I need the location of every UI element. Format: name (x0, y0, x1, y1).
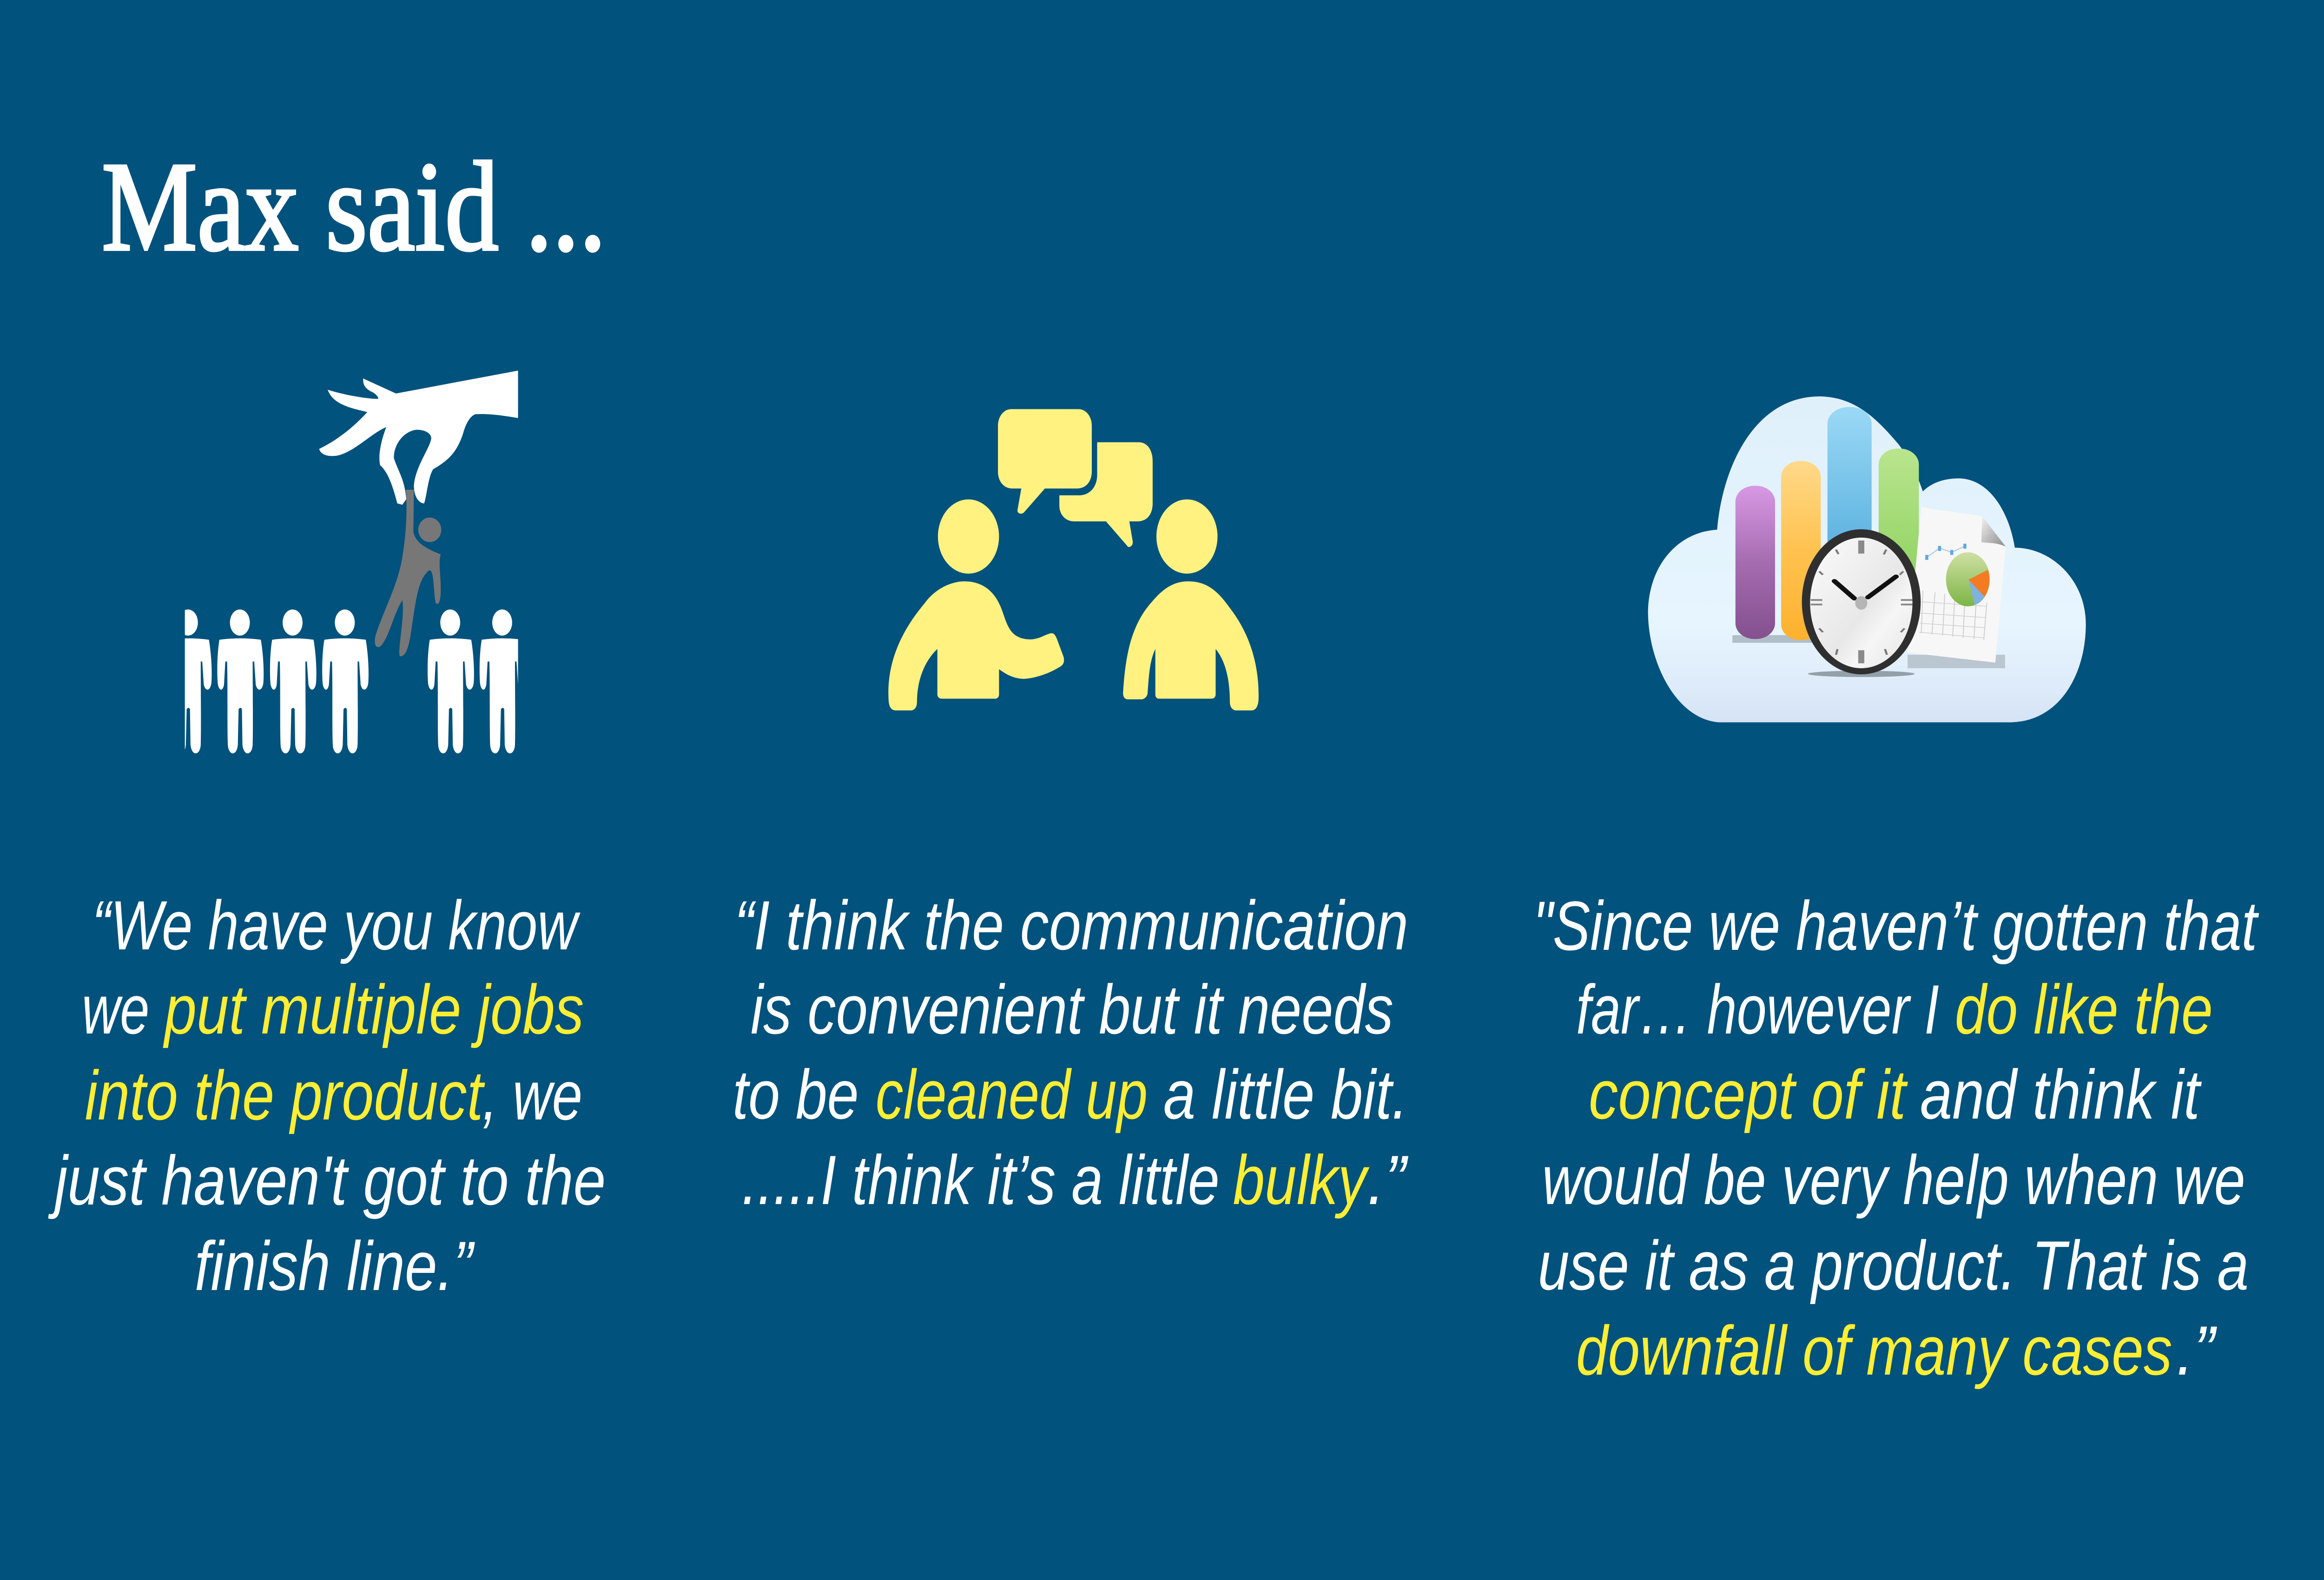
icon part: clock (1802, 529, 1921, 674)
icon part: clock shadow (1808, 671, 1915, 677)
quote: concept and downfall: far… however I (1576, 971, 1939, 1049)
icon part: right speech bubble (1059, 442, 1153, 547)
quote: communication is bulky: a little bit. (1163, 1056, 1408, 1134)
quote: concept and downfall (1533, 888, 2259, 1390)
quote: concept and downfall: do like the (1955, 971, 2213, 1049)
icon part: report shadow (1908, 655, 2005, 668)
quote: concept and downfall: concept of it (1589, 1056, 1908, 1134)
icon part: left person (888, 500, 1064, 711)
icon part: hanging grey figure (375, 490, 441, 656)
quote: communication is bulky (733, 887, 1408, 1219)
icon part: orange bar (1781, 461, 1821, 640)
quote: communication is bulky: cleaned up (876, 1056, 1148, 1134)
icon part: purple bar (1736, 486, 1775, 639)
icon: two people talking with speech bubbles (888, 409, 1259, 711)
quote: communication is bulky: is convenient but it needs (751, 971, 1393, 1049)
quote: concept and downfall: would be very help when we (1542, 1142, 2245, 1219)
quote: concept and downfall: downfall of many cases (1576, 1312, 2172, 1390)
quote: communication is bulky: to be (733, 1056, 859, 1134)
icon: hand picking a person from a crowd (165, 370, 526, 753)
icon part: blue bar (1828, 407, 1872, 565)
quote: Max on multiple jobs: just haven't got to the (48, 1142, 606, 1220)
icon part: report page (1908, 507, 2006, 663)
slide: Max said quotes (48, 159, 2259, 1389)
quote: concept and downfall: use it as a product. That is a (1538, 1227, 2249, 1305)
quote: Max on multiple jobs: into the product (85, 1057, 485, 1135)
quote: Max on multiple jobs (48, 887, 606, 1305)
quote: Max on multiple jobs: finish line.” (195, 1228, 475, 1305)
quote: communication is bulky: .” (1367, 1142, 1408, 1219)
icon part: green bar (1879, 448, 1919, 584)
icon part: row of white people (165, 609, 526, 753)
quote: concept and downfall: .” (2177, 1312, 2217, 1390)
quote: concept and downfall: and think it (1920, 1056, 2202, 1134)
quote: concept and downfall: "Since we haven’t gotten that (1533, 888, 2259, 965)
icon part: cloud (1648, 396, 2086, 722)
quote: Max on multiple jobs: “We have you know (92, 887, 581, 965)
quote: communication is bulky: “I think the communication (734, 887, 1408, 965)
quote: Max on multiple jobs: , we (482, 1057, 582, 1135)
icon part: right person (1123, 500, 1259, 711)
icon part: left speech bubble (998, 409, 1092, 514)
title: Max said ... (102, 136, 606, 277)
icon: cloud with bars, clock and report (1648, 396, 2086, 722)
quote: Max on multiple jobs: put multiple jobs (163, 971, 584, 1049)
icon part: white hand (319, 370, 518, 505)
quote: communication is bulky: bulky (1233, 1142, 1370, 1219)
icon part: bars shadow (1732, 635, 1813, 643)
quote: Max on multiple jobs: we (82, 971, 149, 1049)
quote: communication is bulky: .....I think it’s a little (742, 1142, 1220, 1219)
